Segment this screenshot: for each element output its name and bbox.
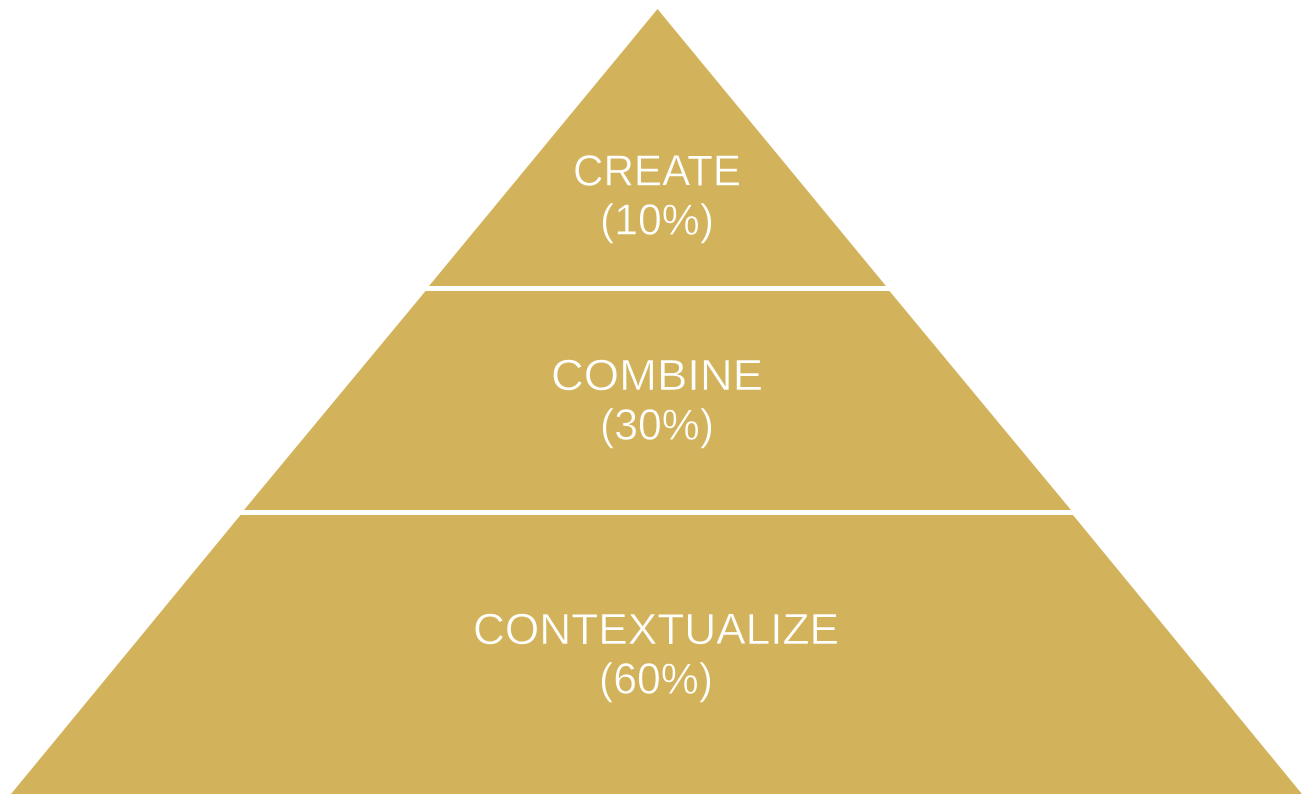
pyramid tier: contextualize: (60%) [599,654,713,704]
pyramid tier: contextualize [11,515,1302,794]
pyramid tier: contextualize: CONTEXTUALIZE [473,605,839,654]
pyramid tier: combine: (30%) [600,400,714,450]
pyramid tier: create: (10%) [600,196,714,244]
pyramid tier: create: CREATE [573,146,741,196]
pyramid tier: combine [244,291,1071,510]
pyramid tier: create [429,9,886,286]
pyramid tier: combine: COMBINE [551,351,763,400]
